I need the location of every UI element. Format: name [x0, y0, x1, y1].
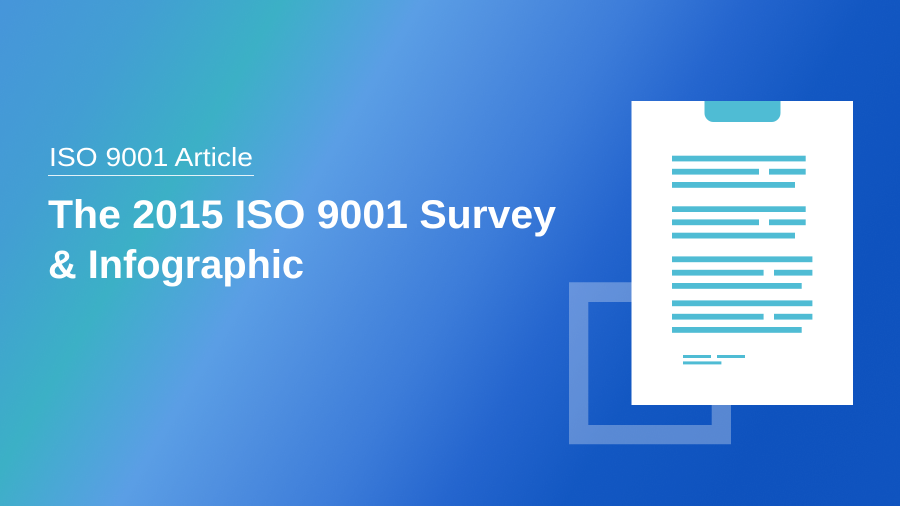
document page [632, 101, 853, 405]
document icon [632, 101, 853, 405]
clipboard tab [704, 101, 780, 122]
title line 2: & Infographic [48, 243, 304, 287]
text lines [672, 156, 812, 364]
title: The 2015 ISO 9001 Survey [48, 193, 557, 237]
decorative square frame [569, 282, 731, 444]
eyebrow: ISO 9001 Article: ISO 9001 Article [49, 142, 253, 172]
